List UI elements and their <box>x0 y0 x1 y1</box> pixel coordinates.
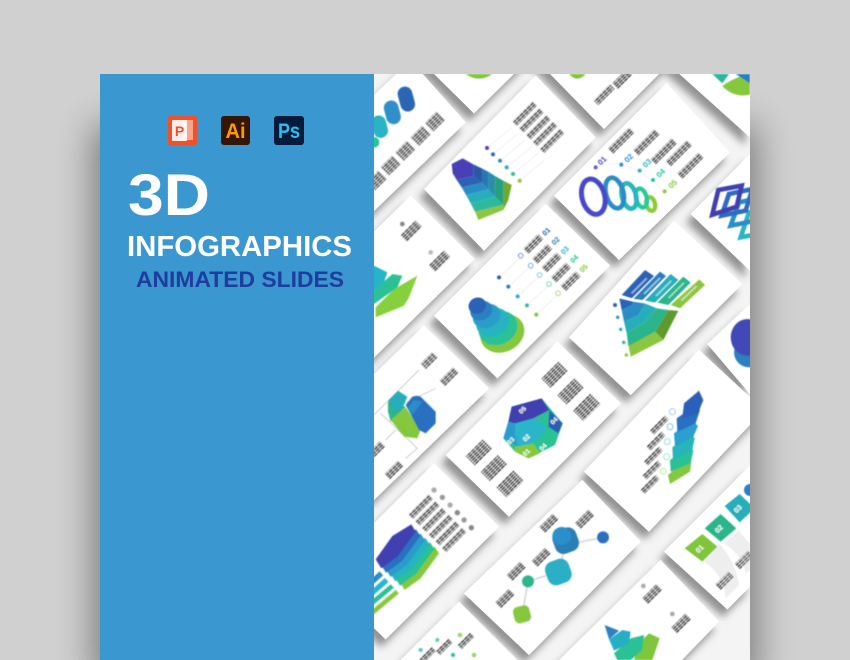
slide: hexagon cube: 03 <box>506 436 517 446</box>
slide: hexagon cube: 04 <box>539 442 549 453</box>
slide: stacked discs <box>466 225 590 360</box>
slide: numbered tiles <box>685 484 756 598</box>
slide: diamond frames <box>712 186 772 237</box>
heading: INFOGRAPHICS: INFOGRAPHICS <box>127 231 352 263</box>
slide: numbered tiles: 03 <box>732 503 744 515</box>
slide: bottom-left list <box>419 632 476 660</box>
slide: stacked discs: 01 <box>540 225 552 238</box>
slide: hexagon cube: 01 <box>522 448 532 458</box>
slide: rings: 02 <box>623 152 636 165</box>
slide: cut-off cylinder <box>731 319 764 367</box>
slide: stacked discs: 05 <box>577 262 590 274</box>
slide: stacked discs: 04 <box>568 252 581 265</box>
icon: Photoshop: Ps <box>278 120 300 143</box>
slide: hexagon cube <box>466 362 600 498</box>
slide: rings: 05 <box>667 178 680 191</box>
icon: PowerPoint: P <box>175 123 184 139</box>
panel: blue cover <box>100 74 374 660</box>
icon: PowerPoint <box>168 116 197 145</box>
slide: numbered tiles: 02 <box>713 523 725 535</box>
slide: cylinders <box>367 85 445 190</box>
icon: Photoshop <box>274 116 304 145</box>
slide: blob diagram <box>366 352 458 479</box>
slide: rings: 04 <box>655 167 668 180</box>
slide: stacked discs: 02 <box>549 235 562 247</box>
panel: tilted slide collage <box>374 74 750 660</box>
slide: rings <box>578 127 704 217</box>
slide: hexagon cube: 04 <box>550 416 560 426</box>
slide: stepped pyramid with list <box>452 101 564 220</box>
slide: layered stack <box>372 487 474 613</box>
slide: stacked discs: 03 <box>559 244 571 256</box>
slide: hexagon cube: 05 <box>518 405 528 416</box>
slide: molecule <box>496 510 609 625</box>
slide: numbered tiles: 01 <box>693 543 706 555</box>
slide: hexagon cube: 02 <box>522 433 532 443</box>
icon: Illustrator <box>221 116 250 145</box>
slide: banner pyramid <box>613 270 705 357</box>
slide: rings: 01 <box>596 154 609 167</box>
slide: bottom pyramid <box>605 584 691 660</box>
slide: top chart fragments <box>465 74 750 106</box>
subheading: ANIMATED SLIDES: ANIMATED SLIDES <box>136 267 344 292</box>
icon: Illustrator: Ai <box>226 120 246 143</box>
slide: arrow stack <box>640 391 703 494</box>
title: 3D: 3D <box>128 163 210 228</box>
slide: rings: 03 <box>641 157 654 170</box>
slide: steps <box>364 220 451 317</box>
slide sheets <box>374 74 750 660</box>
